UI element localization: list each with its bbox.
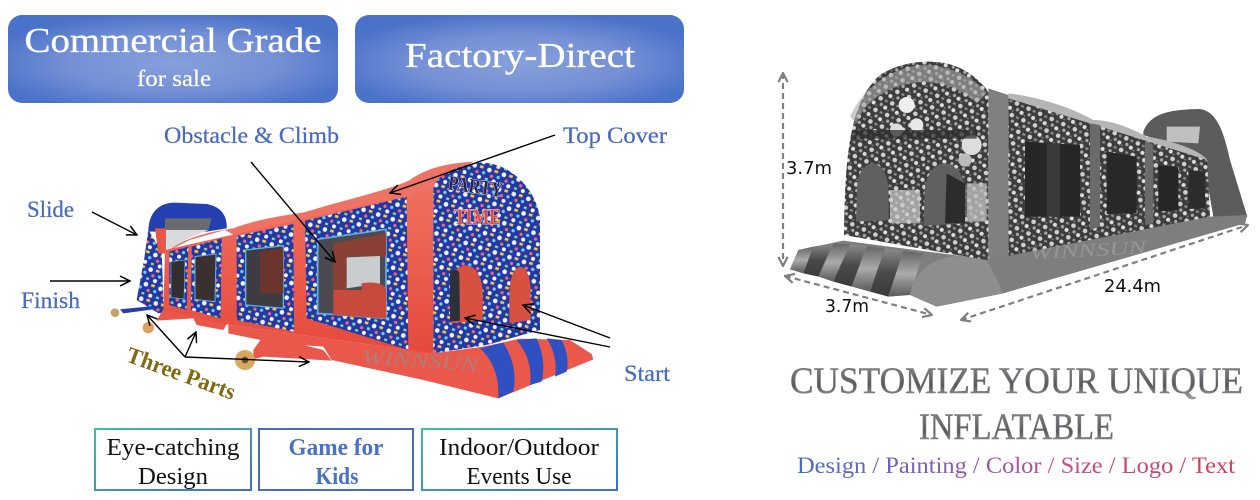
feature box: game for kids: Kids xyxy=(316,464,358,490)
label: slide: Slide xyxy=(27,197,74,222)
photo: colourful inflatable obstacle course: TIME xyxy=(454,204,501,229)
dimension label: height 3.7m: 3.7m xyxy=(786,158,832,179)
feature box: indoor/outdoor events use: Indoor/Outdoor xyxy=(439,435,599,461)
dimension label: width 3.7m: 3.7m xyxy=(825,296,869,317)
feature box: eye-catching design: Design xyxy=(138,464,208,490)
button: commercial grade for sale: Commercial Grade xyxy=(24,21,322,60)
photo: greyscale inflatable with dimensions xyxy=(790,62,1247,307)
feature box: game for kids xyxy=(259,429,413,490)
photo: colourful inflatable obstacle course: WINNSUN xyxy=(361,346,481,377)
heading: customize your unique inflatable: INFLATABLE xyxy=(919,407,1114,448)
dimension label: length 24.4m: 24.4m xyxy=(1104,276,1161,297)
button: factory-direct: Factory-Direct xyxy=(405,36,635,75)
label: start: Start xyxy=(624,361,671,386)
tagline: customization options: Design / Painting / Color / Size / Logo / Text xyxy=(797,453,1236,478)
feature box: indoor/outdoor events use xyxy=(422,429,617,490)
photo: greyscale inflatable with dimensions: WINNSUN xyxy=(1029,237,1149,264)
label: finish: Finish xyxy=(21,288,81,313)
button: factory-direct xyxy=(355,15,684,103)
heading: customize your unique inflatable: CUSTOMIZE YOUR UNIQUE xyxy=(790,361,1243,402)
heading: customize your unique inflatable xyxy=(790,361,1243,448)
feature box: eye-catching design xyxy=(95,429,251,490)
photo: colourful inflatable obstacle course: PARTY xyxy=(447,172,504,202)
dimension arrow: height xyxy=(782,73,784,266)
photo: colourful inflatable obstacle course xyxy=(111,162,593,398)
feature box: eye-catching design: Eye-catching xyxy=(106,435,240,461)
arrows: callouts to the inflatable xyxy=(50,135,610,362)
feature box: indoor/outdoor events use: Events Use xyxy=(466,464,572,490)
button: commercial grade for sale: for sale xyxy=(137,66,211,91)
label: three parts: Three Parts xyxy=(123,342,239,405)
button: commercial grade for sale xyxy=(8,15,338,103)
label: top cover: Top Cover xyxy=(563,123,667,148)
dimension arrow: length xyxy=(961,225,1248,320)
label: obstacle & climb: Obstacle & Climb xyxy=(164,123,339,148)
feature box: game for kids: Game for xyxy=(288,435,384,461)
dimension arrow: width xyxy=(785,276,932,315)
